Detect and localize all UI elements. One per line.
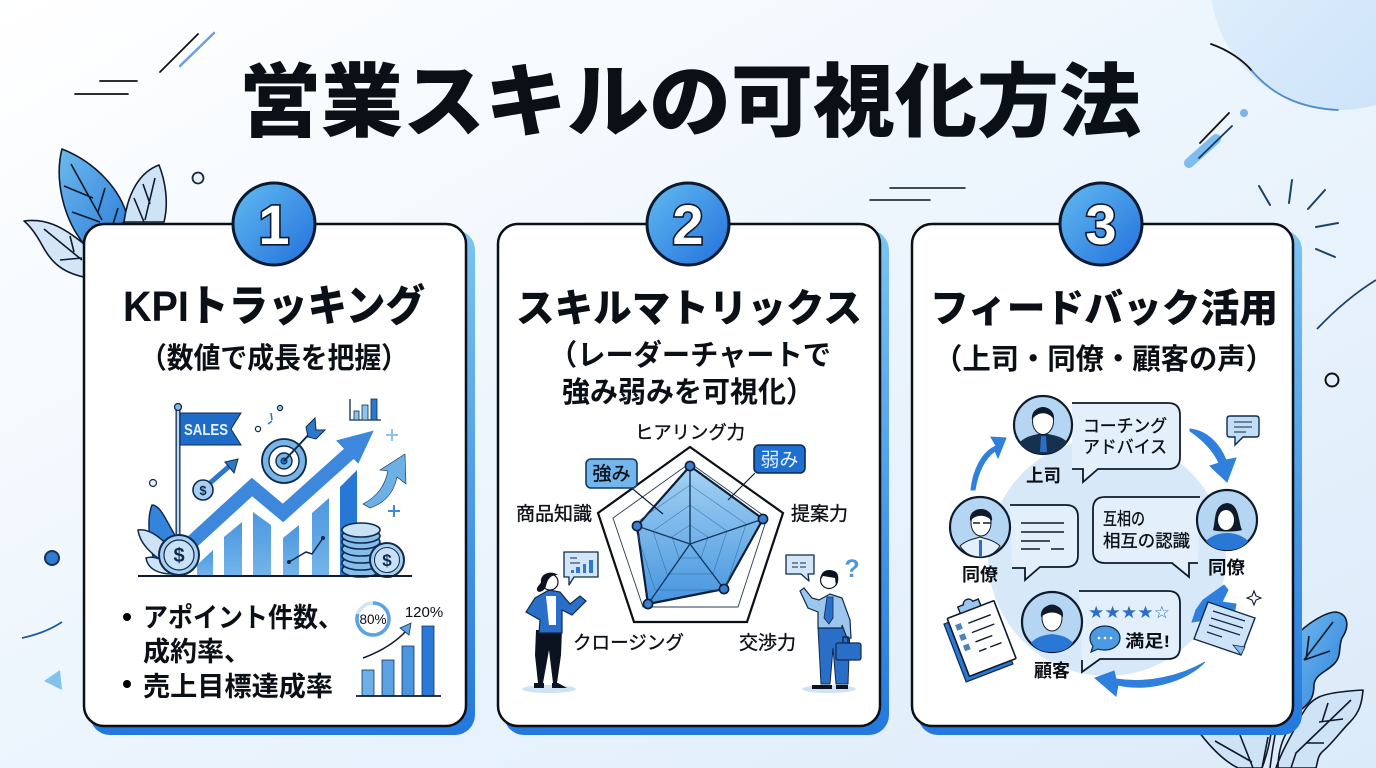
- label: supervisor: 上司: [1026, 466, 1061, 486]
- heading 2: スキルマトリックス: [516, 288, 862, 331]
- radar chart: [516, 422, 848, 654]
- illustration: businessman: [786, 555, 861, 693]
- subheading 2: （レーダーチャートで: [549, 338, 831, 372]
- callout: strength: [586, 459, 663, 514]
- speech bubble: customer: [1079, 591, 1180, 672]
- light arrow right: [363, 454, 406, 508]
- mini bars: [356, 626, 441, 696]
- illustration: businesswoman: [522, 552, 598, 693]
- panel 2: skill matrix: [498, 183, 889, 735]
- card shadow 1: [90, 230, 475, 735]
- speech bubble: customer: ★★★★☆: [1088, 603, 1170, 623]
- feedback cycle: [939, 396, 1261, 696]
- avatar: supervisor: [1014, 396, 1072, 454]
- callout: weakness: 弱み: [760, 450, 799, 471]
- decorative items left bottom: [22, 551, 62, 690]
- callout: weakness: [728, 445, 805, 500]
- front coin: [370, 543, 404, 577]
- arrow: top to right: [1190, 429, 1236, 482]
- plus marks: [386, 429, 400, 517]
- radar chart: 提案力: [791, 503, 848, 525]
- avatar: right colleague: [1197, 490, 1257, 550]
- small ring: [192, 172, 204, 184]
- ground line: [138, 575, 412, 577]
- panel 3: feedback: [912, 183, 1302, 735]
- briefcase: [836, 637, 861, 660]
- illustration: sales growth chart: [138, 399, 412, 577]
- avatar: customer: [1022, 592, 1082, 652]
- small icons near target: [150, 405, 283, 486]
- label 120%: 120%: [405, 604, 443, 621]
- decorative rays: [1259, 180, 1338, 257]
- decorative lines top right: [870, 44, 1338, 200]
- card 1: [84, 224, 466, 726]
- speech bubble: supervisor: アドバイス: [1083, 437, 1167, 457]
- card 2: [498, 224, 880, 726]
- mini bar icon: [350, 399, 381, 420]
- subheading 1: （数値で成長を把握）: [140, 342, 408, 375]
- donut 80%: 80%: [359, 612, 387, 627]
- question mark: ?: [844, 555, 860, 583]
- card shadow 3: [918, 230, 1302, 735]
- decorative leaves bottom right: [1196, 612, 1363, 768]
- axes: [637, 466, 763, 604]
- heading 1: KPIトラッキング: [123, 282, 425, 331]
- label: right colleague: 同僚: [1208, 558, 1245, 578]
- KPI bullet list: [123, 603, 343, 702]
- big dollar coin: [159, 535, 199, 575]
- cycle background circle: [988, 438, 1226, 676]
- small trend line: [287, 536, 325, 564]
- speech bubble: left colleague: [1010, 505, 1078, 580]
- decorative leaves top left: [24, 149, 166, 277]
- speech bubble: supervisor: コーチング: [1083, 416, 1167, 436]
- speech icon: chart: [564, 552, 598, 585]
- small dot: [1240, 109, 1248, 117]
- coin stack: [342, 523, 380, 577]
- target with dart: [262, 418, 325, 483]
- card 3: [912, 224, 1293, 726]
- front coin: $: [382, 551, 392, 570]
- arrow: bottom: [1095, 662, 1205, 696]
- mini arrow: [363, 623, 411, 658]
- speech bubble: right colleague: [1093, 497, 1200, 577]
- radar chart: 商品知識: [516, 503, 592, 525]
- title: 営業スキルの可視化方法: [239, 58, 1141, 147]
- callout: strength: 強み: [592, 463, 631, 485]
- small comment icon: [1227, 416, 1259, 445]
- right arc and ring: [1317, 280, 1376, 386]
- number badge 2: 2: [672, 193, 704, 256]
- mini KPI chart: [356, 603, 443, 696]
- KPI bullet list: 成約率、: [143, 637, 251, 667]
- KPI bullet list: 売上目標達成率: [143, 672, 333, 702]
- outer pentagon: [598, 447, 783, 622]
- flag: SALES: [184, 422, 228, 439]
- speech bubble: supervisor: [1072, 403, 1180, 482]
- thumbs up and note icon: [1192, 585, 1255, 655]
- number badge 1: 1: [258, 193, 290, 256]
- card shadow 2: [504, 230, 889, 735]
- decorative lines top left: [75, 33, 214, 94]
- panel 2: skill matrix: 強み弱みを可視化）: [562, 376, 814, 409]
- number badge 3: 3: [1085, 193, 1117, 256]
- clipboard icon: [939, 591, 1018, 682]
- heading 3: フィードバック活用: [930, 288, 1278, 331]
- inner ring: [613, 463, 767, 607]
- speech icon: [786, 555, 814, 581]
- data points: [632, 461, 768, 609]
- speech bubble: customer: 満足!: [1125, 631, 1170, 651]
- coin with arrow: [193, 459, 238, 500]
- number badge 2: [647, 183, 729, 265]
- bars: [197, 470, 357, 576]
- subheading 3: （上司・同僚・顧客の声）: [934, 343, 1274, 376]
- number badge 1: [233, 183, 315, 265]
- panel 1: KPI tracking: [84, 183, 475, 735]
- background circle top right: [1210, 0, 1376, 110]
- label: customer: 顧客: [1034, 661, 1070, 681]
- sparkle: [1247, 591, 1261, 605]
- axis labels: ヒアリング力: [635, 422, 745, 443]
- arrow: left to top: [971, 437, 1006, 490]
- KPI bullet list: アポイント件数、: [143, 603, 343, 633]
- number badge 3: [1060, 183, 1142, 265]
- grid rings: [634, 485, 746, 590]
- growth arrow: [192, 432, 372, 542]
- flag: [174, 404, 241, 540]
- coin with arrow: $: [199, 483, 207, 498]
- small plant: [138, 505, 180, 574]
- data polygon: [637, 466, 763, 604]
- avatar: left colleague: [950, 497, 1010, 557]
- label: left colleague: 同僚: [962, 565, 998, 585]
- speech bubble: right colleague: 相互の認識: [1103, 531, 1190, 551]
- radar chart: 交渉力: [739, 632, 796, 654]
- radar chart: クロージング: [573, 632, 684, 654]
- speech bubble: right colleague: 互相の: [1103, 509, 1145, 529]
- big dollar coin: $: [173, 545, 185, 567]
